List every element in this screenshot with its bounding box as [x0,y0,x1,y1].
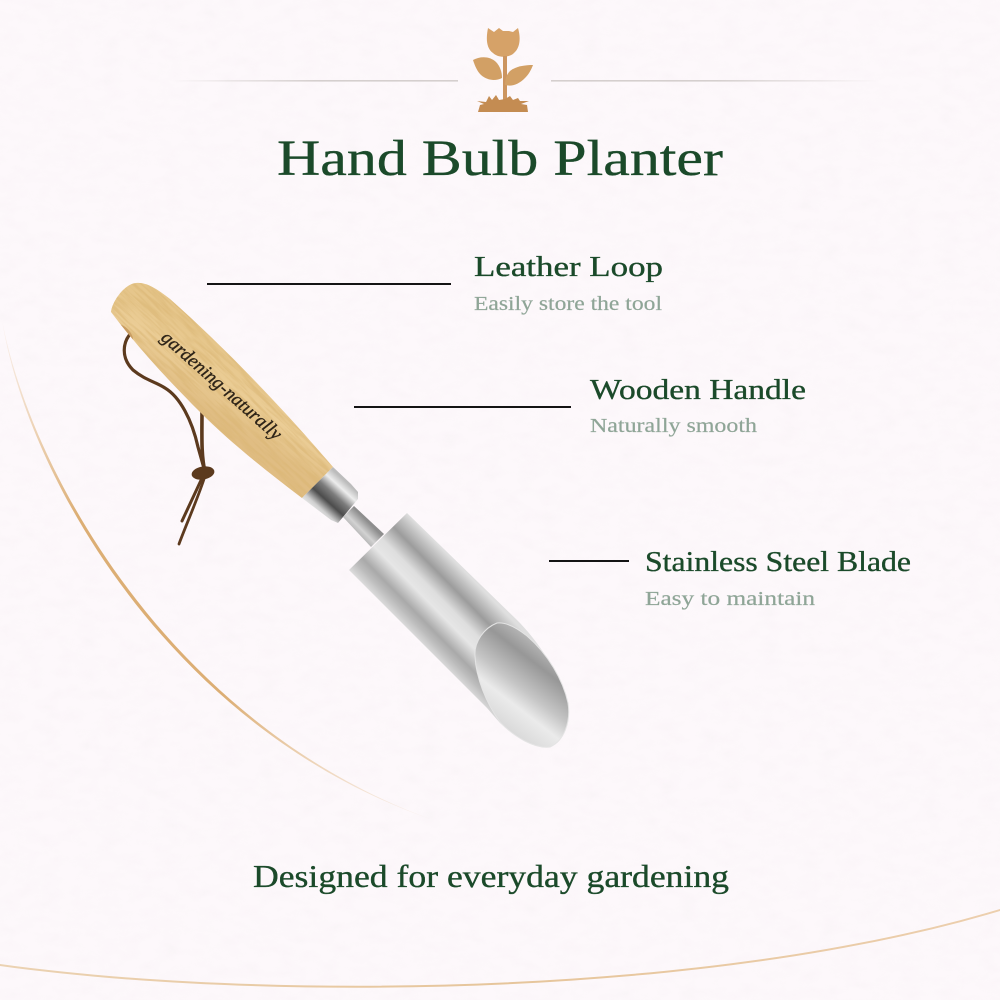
leader line: stainless steel blade [549,560,629,562]
decorative gold arc: bottom [0,909,1000,988]
metal collar [302,467,358,523]
callout: leather loop: Easily store the tool [474,293,662,315]
blade scoop [475,623,569,747]
stainless steel blade body [349,513,569,747]
callout: stainless steel blade: Stainless Steel Blade [645,546,911,578]
leader line: wooden handle [354,406,571,408]
callout: wooden handle: Wooden Handle [590,374,806,406]
callout: leather loop: Leather Loop [474,251,663,283]
footer tagline: Designed for everyday gardening [253,858,729,894]
callout: stainless steel blade: Easy to maintain [645,588,815,610]
callout: stainless steel blade [645,546,911,610]
hand bulb planter tool [111,282,570,748]
handle engraving: gardening-naturally [157,327,286,445]
header rule: right [551,80,880,82]
wooden handle [111,282,333,498]
leather loop [124,313,215,544]
decorative gold arc: left [2,320,433,820]
title: Hand Bulb Planter [277,131,723,187]
icon: tulip [473,28,533,112]
leader line: leather loop [207,283,451,285]
callout: wooden handle: Naturally smooth [590,415,757,437]
callout: leather loop [474,251,663,315]
shaft [343,506,384,547]
header rule: left [170,80,458,82]
callout: wooden handle [590,374,806,437]
